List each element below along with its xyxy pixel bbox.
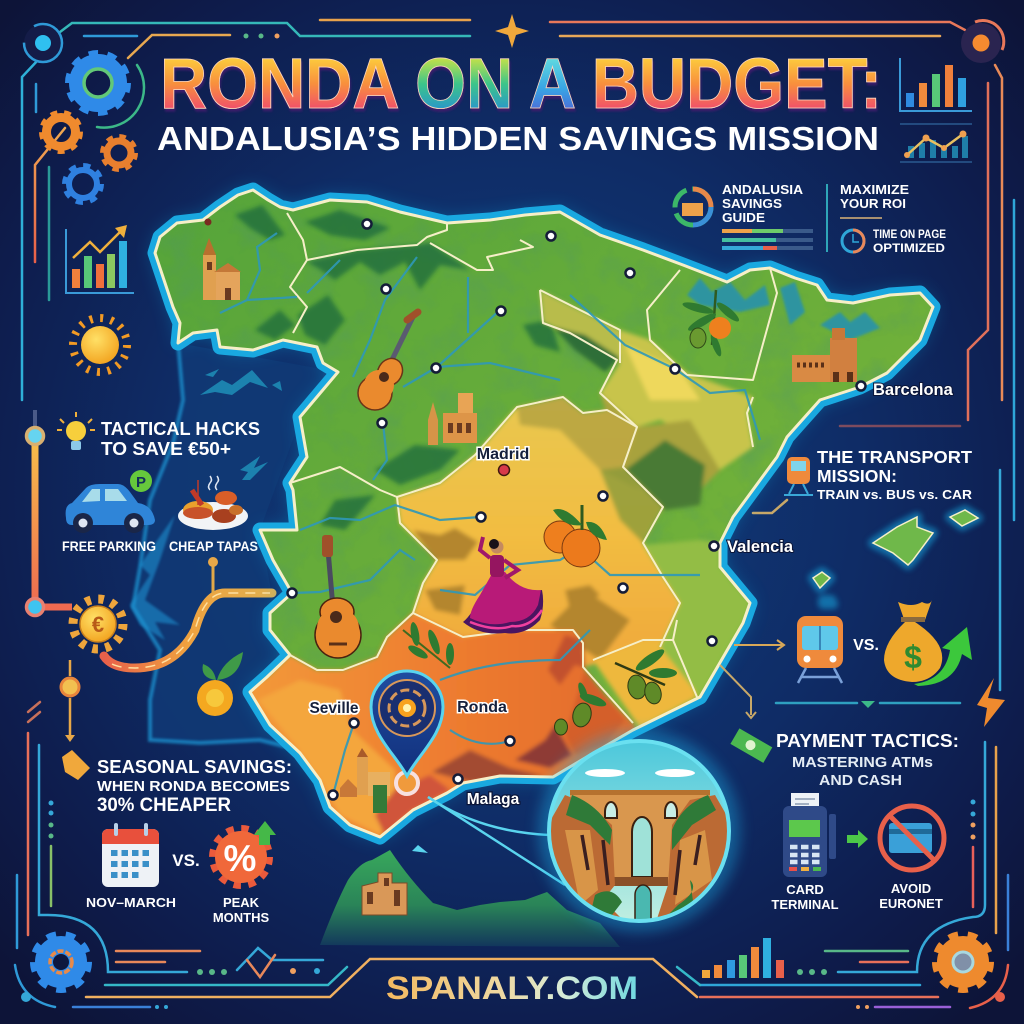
icon: blue car: P xyxy=(136,474,146,491)
panel: tactical hacks: TO SAVE €50+ xyxy=(101,439,231,459)
text: maximize: MAXIMIZE xyxy=(840,183,909,197)
icon: orange fruit xyxy=(197,652,243,716)
arrow: to transport xyxy=(734,640,784,650)
label: nov-march: NOV–MARCH xyxy=(86,895,176,910)
icon: gear bottom right xyxy=(936,935,990,989)
title xyxy=(157,45,882,158)
panel: savings guide: SAVINGS xyxy=(722,197,782,211)
region: north Africa xyxy=(320,850,620,947)
teal peaks xyxy=(687,278,880,340)
icon: no card xyxy=(880,806,944,870)
brown terrain xyxy=(413,528,630,660)
footer: website: SPANALY.COM xyxy=(386,970,638,1006)
panel: seasonal savings xyxy=(62,750,292,925)
icon: small island xyxy=(412,845,428,853)
Portugal-side seabed xyxy=(130,343,338,750)
label: card terminal: CARD xyxy=(786,882,824,897)
text: transport options: TRAIN vs. BUS vs. CAR xyxy=(817,488,972,502)
icon: bird xyxy=(204,218,212,226)
icon: guitar north xyxy=(358,312,418,410)
panel: payment tactics: EURONET xyxy=(879,896,943,911)
coast glow xyxy=(155,190,933,837)
icon: olives south xyxy=(554,681,608,735)
icon: train large xyxy=(797,616,843,683)
label: transport vs: VS. xyxy=(853,637,879,654)
label: cheap tapas: CHEAP TAPAS xyxy=(169,539,258,554)
path: road xyxy=(104,557,272,668)
arrow: green xyxy=(847,830,868,848)
icon: money bag xyxy=(884,600,972,686)
label: vs: VS. xyxy=(172,851,200,870)
icon: percent burst xyxy=(214,821,276,884)
panel: savings guide xyxy=(675,183,946,255)
icon: tapas plate xyxy=(178,476,248,530)
icon: euro coin: € xyxy=(92,612,104,637)
label: Madrid: Madrid xyxy=(477,446,529,463)
icon: train small xyxy=(784,457,813,495)
chart: left growth xyxy=(66,225,134,293)
rivers xyxy=(220,233,760,795)
chart: bottom bars xyxy=(702,938,784,978)
text: 30 percent: 30% CHEAPER xyxy=(97,795,231,816)
chart: top-right bars xyxy=(900,58,972,111)
region: south-east yellow xyxy=(593,640,697,728)
icon: blue car xyxy=(66,470,155,533)
region borders xyxy=(287,213,777,723)
icon: card terminal xyxy=(783,793,836,877)
label: peak months: PEAK xyxy=(223,895,260,910)
icon: percent burst: % xyxy=(224,838,256,879)
text: time on page: TIME ON PAGE xyxy=(873,229,946,241)
heading: transport: THE TRANSPORT xyxy=(817,447,972,467)
icon: lightning xyxy=(977,678,1005,727)
icon: calendar xyxy=(102,823,159,887)
panel: seasonal savings: MONTHS xyxy=(213,910,269,925)
panel: savings guide: OPTIMIZED xyxy=(873,243,945,255)
icon: guitar south xyxy=(315,535,361,658)
label: Ronda: Ronda xyxy=(457,699,507,716)
map: Spain xyxy=(140,180,960,845)
panel: transport mission: MISSION: xyxy=(817,466,897,486)
callout: Ronda bridge lens xyxy=(538,730,740,932)
title: RONDA ON A BUDGET: xyxy=(160,45,882,124)
panel: savings guide: GUIDE xyxy=(722,211,765,225)
heading: payment: PAYMENT TACTICS: xyxy=(776,730,959,751)
label: Valencia: Valencia xyxy=(727,538,794,556)
label: Malaga: Malaga xyxy=(467,791,520,808)
heading: seasonal savings: SEASONAL SAVINGS: xyxy=(97,756,292,777)
label: Seville: Seville xyxy=(309,700,359,717)
panel: transport mission xyxy=(784,447,972,502)
icon: cash xyxy=(730,728,772,763)
icon: donut xyxy=(675,189,711,225)
label: free parking: FREE PARKING xyxy=(62,539,156,554)
icon: euro coin xyxy=(73,599,123,649)
icon: Ronda village xyxy=(340,748,390,813)
chart: top-right line xyxy=(900,124,972,162)
heading: tactical hacks: TACTICAL HACKS xyxy=(101,419,260,439)
icon: lightbulb xyxy=(57,412,95,450)
panel: payment tactics xyxy=(730,728,959,912)
icon: star xyxy=(495,14,529,48)
panel: tactical hacks xyxy=(57,412,260,554)
icon: price tag xyxy=(62,750,90,780)
label: avoid euronet: AVOID xyxy=(891,881,931,896)
icon: corner node top right xyxy=(961,20,1004,63)
icon: gear bottom left xyxy=(34,935,88,989)
dark mountain patches xyxy=(234,204,562,532)
icon: money bag: $ xyxy=(904,639,922,675)
title: ANDALUSIA’S HIDDEN SAVINGS MISSION xyxy=(157,121,879,158)
region: golden interior xyxy=(397,397,680,667)
map nodes xyxy=(288,220,866,800)
icon: olive branch north-east xyxy=(682,290,741,357)
region: balearic islands xyxy=(813,510,978,604)
icon: oranges xyxy=(544,505,607,567)
icon: olive sprig xyxy=(403,621,454,668)
regions blended xyxy=(240,290,753,845)
icon: gears top left xyxy=(42,54,135,202)
label: Madrid xyxy=(477,446,529,476)
icon: clock xyxy=(842,230,864,252)
panel: payment tactics: TERMINAL xyxy=(771,897,839,912)
arrow: to payment xyxy=(720,665,756,718)
icon: sun xyxy=(73,318,127,372)
icon: location pin xyxy=(371,671,443,794)
region: yellow strip north-east xyxy=(600,330,753,470)
icon: corner node top left xyxy=(24,24,62,62)
icon: northeast palace xyxy=(792,328,857,382)
icon: flamenco dancer xyxy=(463,537,543,634)
panel: payment tactics: AND CASH xyxy=(819,772,902,789)
text: guide: ANDALUSIA xyxy=(722,183,803,197)
progress bars xyxy=(722,229,813,250)
text: when ronda: WHEN RONDA BECOMES xyxy=(97,778,290,795)
icon: northwest church xyxy=(203,238,241,300)
panel: savings guide: YOUR ROI xyxy=(840,197,906,211)
icon: olives east xyxy=(615,646,677,706)
path: circuit line xyxy=(26,410,72,616)
icon: cathedral xyxy=(428,393,477,445)
region: Andalusia xyxy=(240,613,640,845)
text: atms: MASTERING ATMs xyxy=(792,754,933,771)
label: Barcelona: Barcelona xyxy=(873,381,954,399)
callout lines to lens xyxy=(428,797,565,885)
icon: node left xyxy=(61,660,79,742)
